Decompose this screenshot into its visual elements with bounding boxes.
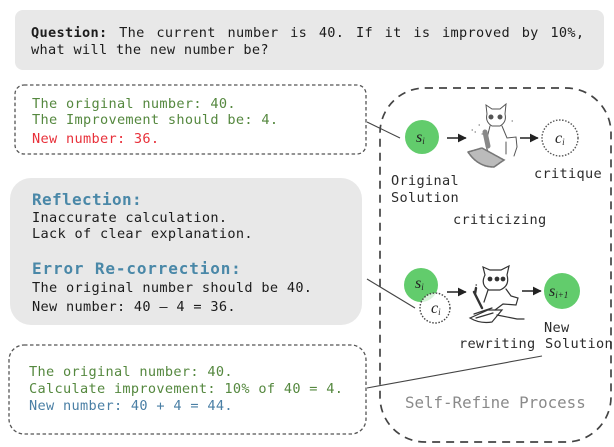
label: rewriting: rewriting [459,336,535,352]
node: solution with critique: i [438,307,441,317]
panel: original solution text: New number: 36. [32,131,159,147]
node: solution with critique: s [415,275,421,292]
arrow: rewriter to new solution [522,290,541,292]
label: new solution: New [544,320,570,336]
panel: question [15,10,604,70]
icon: critic cat [468,104,517,167]
panel: new solution text [9,345,366,434]
arrow: critic to critique [520,137,538,139]
arrow: input to rewriter [447,291,466,293]
node: new solution: i+1 [555,290,568,300]
label: self-refine process: Self-Refine Process [405,393,586,412]
panel: reflection: New number: 40 – 4 = 36. [32,299,236,315]
icon: rewriting cat [470,266,524,322]
panel: new solution text: New number: 40 + 4 = 44. [29,398,233,414]
panel: question: what will the new number be? [31,42,269,58]
node: critique [542,120,578,156]
panel: reflection: Error Re-correction: [32,259,242,278]
panel: question: Question: The current number is 40. If it is improved by 10%, [31,25,584,41]
panel: reflection: Lack of clear explanation. [32,226,253,242]
connector: original solution [367,122,400,138]
label: new solution [544,320,613,352]
label: original solution: Original [391,173,459,189]
label: critique: critique [534,166,602,182]
node: new solution [544,273,580,309]
label: new solution: Solution [545,336,613,352]
connector: new solution [367,356,542,388]
label: original solution: Solution [391,190,459,206]
connector: reflection [367,279,415,308]
panel: new solution text: Calculate improvement: 10% of 40 = 4. [29,381,343,397]
panel: new solution text: The original number: 40. [29,364,233,380]
panel: reflection: Reflection: [32,190,142,209]
node: new solution: s [549,283,555,300]
panel: original solution text: The Improvement should be: 4. [32,112,278,128]
node: critique: c [555,130,562,147]
arrow: solution to critic [447,137,466,139]
panel: reflection: Inaccurate calculation. [32,210,227,226]
label: original solution [391,173,459,206]
panel: reflection: The original number should be 40. [32,280,312,296]
node: original solution [405,120,439,154]
node: solution with critique [404,268,450,323]
panel: reflection [10,178,362,325]
node: solution with critique: c [431,300,438,317]
label: criticizing: criticizing [453,212,546,228]
node: original solution: s [416,129,422,146]
node: critique: i [562,137,565,147]
panel: self-refine process [367,88,613,442]
node: solution with critique: i [421,282,424,292]
panel: original solution text: The original number: 40. [32,96,236,112]
panel: original solution text [15,85,366,154]
node: original solution: i [422,136,425,146]
